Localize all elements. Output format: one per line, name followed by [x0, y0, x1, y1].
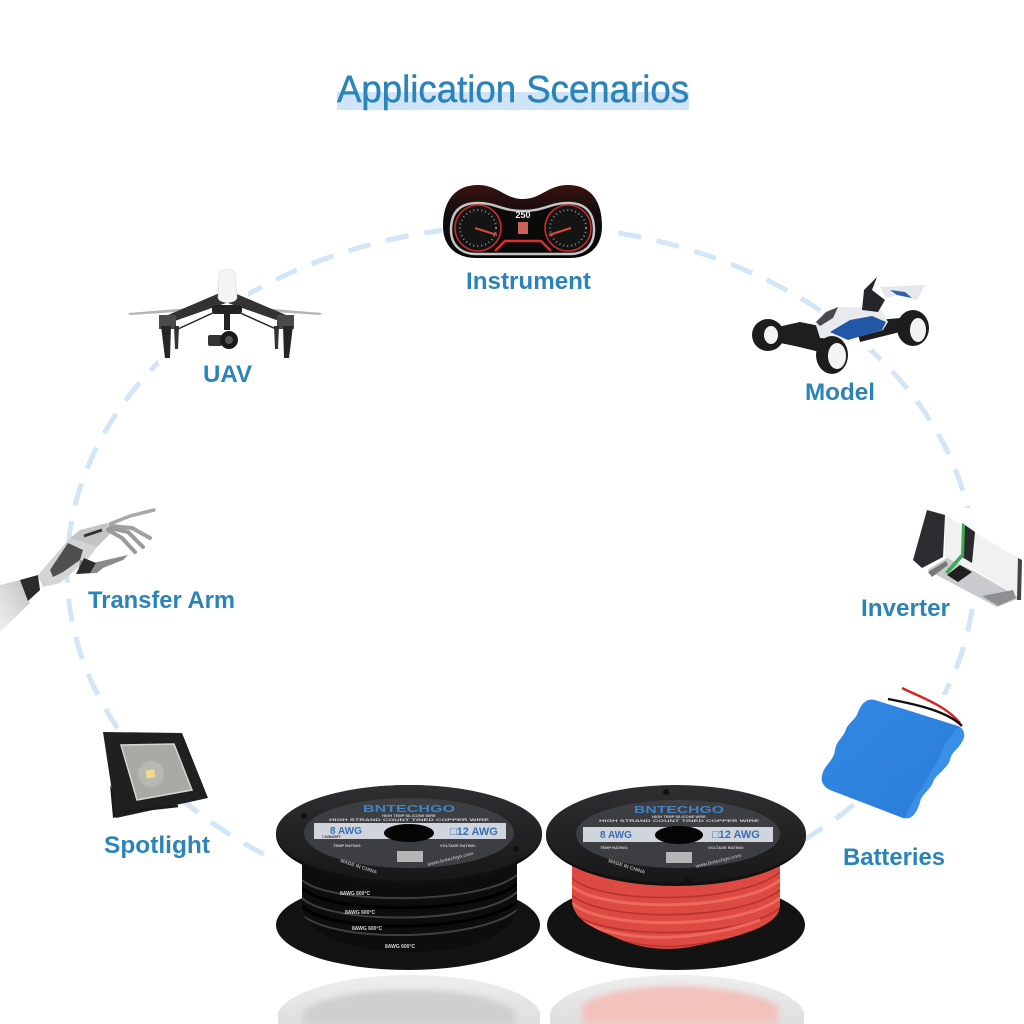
- spool label: BNTECHGO: [363, 804, 455, 815]
- spool label: TEMP RATING:: [333, 843, 362, 848]
- spool label: HIGH STRAND COUNT TINED COPPER WIRE: [329, 817, 490, 822]
- icon: power inverter: [913, 510, 1022, 607]
- spool label: 7.62M/25FT: [322, 835, 342, 839]
- label: Spotlight: Spotlight: [104, 832, 210, 859]
- icon: battery pack: [822, 688, 964, 818]
- icon: UAV drone: [128, 269, 322, 358]
- label: Instrument: Instrument: [466, 268, 591, 295]
- black wire coil: 8AWG 600°C: [345, 910, 375, 916]
- spool label: HIGH STRAND COUNT TINED COPPER WIRE: [599, 818, 760, 823]
- reflection: black spool: [278, 975, 540, 1024]
- spool label: www.bntechgo.com: [426, 851, 475, 868]
- lower flange: [547, 880, 805, 970]
- label: Inverter: Inverter: [861, 595, 950, 622]
- spool label: □12 AWG: [712, 829, 760, 841]
- spool label: 8 AWG: [600, 830, 632, 841]
- spool label: MADE IN CHINA: [339, 858, 378, 876]
- red wire coil: [572, 866, 780, 949]
- label: Batteries: Batteries: [843, 844, 945, 871]
- black wire spool: [276, 785, 542, 970]
- icon: RC model car: [752, 277, 929, 374]
- spool label: MADE IN CHINA: [607, 858, 646, 876]
- spool label: 8 AWG: [330, 826, 362, 837]
- spool label: HIGH TEMP SILICONE WIRE: [382, 813, 436, 818]
- icon: instrument dashboard: [443, 185, 602, 258]
- spool label: VOLTAGE RATING:: [440, 843, 476, 848]
- black wire coil: 8AWG 600°C: [352, 926, 382, 932]
- red wire spool: [546, 785, 806, 970]
- black wire coil: [302, 864, 517, 948]
- spool label: BNTECHGO: [634, 805, 724, 816]
- spool label: www.bntechgo.com: [694, 853, 743, 870]
- spool label: [314, 804, 506, 876]
- upper flange: [546, 786, 806, 886]
- label: Model: Model: [805, 379, 875, 406]
- black wire coil: 8AWG 600°C: [340, 891, 370, 897]
- upper flange: [276, 785, 542, 885]
- label: Transfer Arm: Transfer Arm: [88, 587, 235, 614]
- title: Application Scenarios: [337, 69, 689, 111]
- spool label: □12 AWG: [450, 826, 498, 838]
- spool label: HIGH TEMP SILICONE WIRE: [652, 814, 706, 819]
- label: UAV: UAV: [203, 361, 252, 388]
- icon: LED spotlight: [103, 732, 208, 818]
- spool label: [583, 805, 773, 876]
- spool label: TEMP RATING:: [600, 845, 629, 850]
- dashed connection ring: [67, 175, 1005, 940]
- icon: instrument dashboard: 250: [515, 210, 531, 220]
- lower flange: [276, 880, 540, 970]
- spool label: VOLTAGE RATING:: [708, 845, 744, 850]
- icon: robotic transfer arm: [0, 510, 154, 632]
- black wire coil: 8AWG 600°C: [385, 944, 415, 950]
- reflection: red spool: [550, 975, 804, 1024]
